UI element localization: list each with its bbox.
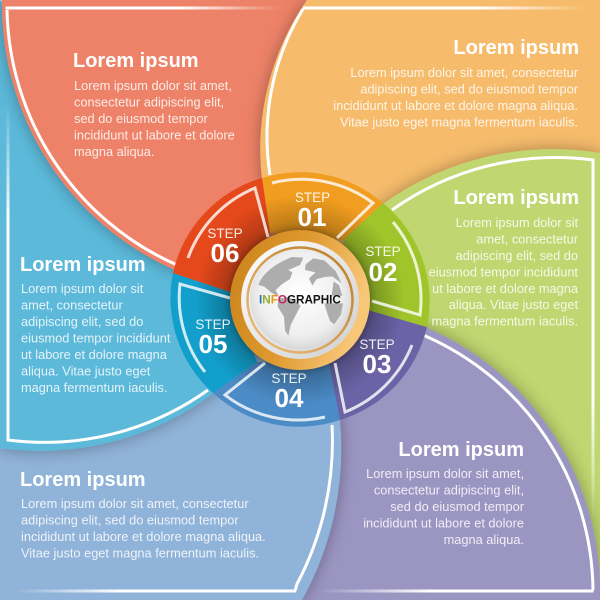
frame: orange panel outline — [267, 8, 585, 175]
label: step 04: 04 — [275, 383, 304, 413]
frame: step 03 — [335, 345, 412, 412]
text block: step 04 — [20, 469, 266, 560]
segment: step 02 — [343, 203, 430, 327]
text block: step 03: Lorem ipsum — [398, 439, 524, 461]
frame: step 01 — [272, 179, 373, 238]
label: step 03: 03 — [363, 349, 391, 379]
label: step 03 — [359, 337, 395, 379]
frame: step 02 — [372, 222, 421, 315]
icon: globe continents — [258, 257, 343, 336]
text block: step 05: adipiscing elit, sed do — [21, 314, 143, 329]
chart: step ring — [170, 172, 430, 427]
text block: step 04: incididunt ut labore et dolore magna aliqua. — [21, 529, 266, 544]
text block: step 02: ut labore et dolore magna — [432, 281, 579, 296]
text block: step 05: magna fermentum iaculis. — [21, 380, 168, 395]
text block: step 03: Lorem ipsum dolor sit amet, — [366, 466, 524, 481]
text block: step 02: eiusmod tempor incididunt — [429, 264, 578, 280]
frame: step 06 — [188, 188, 268, 258]
tan ring — [248, 248, 352, 352]
label: step 04 — [271, 371, 307, 413]
text block: step 02: Lorem ipsum — [453, 187, 579, 209]
text block: step 03: incididunt ut labore et dolore — [363, 516, 524, 530]
text block: step 04: Lorem ipsum dolor sit amet, consectetur — [21, 496, 249, 511]
gold ring — [230, 230, 370, 370]
text block: step 06: incididunt ut labore et dolore — [74, 128, 235, 142]
text block: step 06: magna aliqua. — [74, 144, 154, 159]
text block: step 06: Lorem ipsum dolor sit amet, — [74, 78, 232, 93]
panel: step 06 red background — [2, 0, 330, 300]
frame: green panel outline — [392, 158, 593, 520]
text block: step 05: aliqua. Vitae justo eget — [21, 364, 151, 378]
text block: step 01: incididunt ut labore et dolore magna aliqua. — [333, 98, 578, 113]
center badge — [230, 230, 370, 370]
label: step 06: 06 — [211, 238, 239, 268]
text block: step 05: eiusmod tempor incididunt — [21, 330, 171, 346]
text block: step 04: adipiscing elit, sed do eiusmod tempor — [21, 512, 239, 528]
label: step 01 — [295, 190, 330, 232]
text block: step 06: sed do eiusmod tempor — [74, 111, 208, 126]
text block: step 02: magna fermentum iaculis. — [431, 314, 578, 328]
panel: step 03 purple background — [300, 300, 600, 600]
label: step 05: 05 — [199, 329, 227, 359]
inner shading — [195, 195, 405, 405]
frame: step 04 — [225, 363, 325, 420]
text block: step 02: amet, consectetur — [476, 232, 579, 246]
text block: step 04: Lorem ipsum — [20, 469, 146, 491]
text block: step 03: consectetur adipiscing elit, — [374, 482, 524, 498]
segment: step 01 — [262, 172, 383, 240]
text block: step 06 — [73, 50, 235, 159]
label: step 02: STEP — [365, 244, 401, 259]
label: step 05: STEP — [195, 317, 231, 332]
text block: step 03: sed do eiusmod tempor — [390, 499, 525, 514]
text block: step 05: Lorem ipsum dolor sit — [21, 281, 144, 296]
label: step 06 — [207, 226, 243, 268]
frame: red panel outline — [6, 8, 280, 265]
frame: cyan panel outline — [8, 105, 208, 442]
text block: step 06: consectetur adipiscing elit, — [74, 94, 224, 110]
white disc — [241, 241, 359, 359]
panel: red overlap over cyan — [0, 0, 216, 278]
frame: purple panel outline — [320, 335, 594, 591]
text block: step 01: Vitae justo eget magna fermentum iaculis. — [340, 114, 578, 130]
panel: step 02 green background — [300, 149, 600, 600]
text block: step 05: ut labore et dolore magna — [21, 347, 168, 362]
text block: step 02 — [429, 187, 579, 328]
segment: step 05 — [170, 273, 257, 393]
panel: step 04 blue background — [0, 300, 341, 600]
text block: step 02: Lorem ipsum dolor sit — [456, 215, 578, 230]
segment: step 04 — [213, 362, 340, 427]
label: step 06: STEP — [207, 226, 243, 241]
label: step 01: STEP — [295, 190, 330, 205]
text block: step 01 — [333, 37, 579, 130]
label: step 02 — [365, 244, 401, 287]
label: step 04: STEP — [271, 371, 307, 386]
panel: step 01 orange background — [260, 0, 600, 300]
globe disc — [250, 249, 350, 349]
text block: step 06: Lorem ipsum — [73, 50, 199, 72]
text block: step 05: Lorem ipsum — [20, 254, 146, 276]
label: step 02: 02 — [369, 257, 397, 287]
panel: step 05 cyan background — [0, 0, 300, 451]
segment: step 06 — [173, 178, 270, 292]
label: step 05 — [195, 317, 231, 359]
label: step 01: 01 — [298, 202, 326, 232]
text block: step 05: amet, consectetur — [21, 298, 123, 312]
infographic label: INFOGRAPHIC — [259, 294, 341, 306]
frame: blue panel outline — [15, 425, 332, 591]
text block: step 03 — [363, 439, 525, 547]
text block: step 03: magna aliqua. — [444, 532, 524, 547]
label: step 03: STEP — [359, 337, 395, 352]
frame: step 05 — [179, 284, 230, 372]
text block: step 02: aliqua. Vitae justo eget — [449, 297, 578, 312]
text block: step 01: adipiscing elit, sed do eiusmod tempor — [360, 82, 579, 96]
text block: step 02: adipiscing elit, sed do — [456, 248, 578, 263]
text block: step 01: Lorem ipsum — [453, 37, 579, 59]
text block: step 04: Vitae justo eget magna fermentum iaculis. — [21, 546, 259, 560]
text block: step 05 — [20, 254, 171, 395]
text block: step 01: Lorem ipsum dolor sit amet, consectetur — [350, 65, 579, 80]
segment: step 03 — [329, 310, 427, 420]
